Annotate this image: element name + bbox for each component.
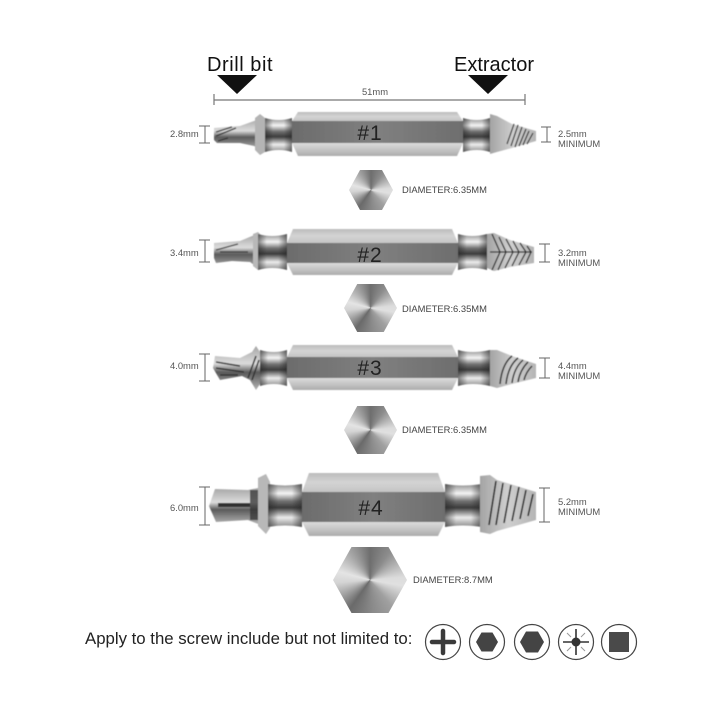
size labels: bit #4: 6.0mm [170, 502, 199, 513]
size labels: bit #2: 3.2mm [558, 247, 587, 258]
dimension: overall length 51mm: 51mm [362, 86, 388, 97]
diameter label #3: DIAMETER:6.35MM [402, 424, 487, 435]
hex cross-section #2 [344, 284, 397, 332]
size labels: bit #1: MINIMUM [558, 138, 600, 149]
hex cross-section #3 [344, 406, 397, 454]
bit #3 [213, 345, 536, 390]
hex cross-section #4 [333, 547, 407, 613]
hex cross-section #1 [349, 170, 393, 210]
size labels: bit #1 [170, 126, 600, 149]
icon: phillips screw [426, 624, 460, 660]
bit #2: #2 [357, 244, 383, 267]
size labels: bit #2 [170, 240, 600, 268]
diameter label #1: DIAMETER:6.35MM [402, 184, 487, 195]
diameter label #4: DIAMETER:8.7MM [413, 574, 493, 585]
caption: screw types: Apply to the screw include but not limited to: [85, 629, 412, 648]
arrow: extractor marker [468, 75, 508, 94]
bit #1: #1 [357, 122, 383, 145]
size labels: bit #3: 4.0mm [170, 360, 199, 371]
size labels: bit #4: 5.2mm [558, 496, 587, 507]
label: Extractor: Extractor [454, 54, 534, 76]
size labels: bit #1: 2.8mm [170, 128, 199, 139]
icon: small hex screw [470, 624, 504, 660]
bit #4: #4 [358, 497, 384, 520]
size labels: bit #4: MINIMUM [558, 506, 600, 517]
size labels: bit #3: 4.4mm [558, 360, 587, 371]
size labels: bit #2: MINIMUM [558, 257, 600, 268]
size labels: bit #1: 2.5mm [558, 128, 587, 139]
bit #3: #3 [357, 357, 383, 380]
size labels: bit #3: MINIMUM [558, 370, 600, 381]
size labels: bit #2: 3.4mm [170, 247, 199, 258]
bit #4 [209, 473, 536, 536]
icon: square screw [602, 624, 636, 660]
diameter label #2: DIAMETER:6.35MM [402, 303, 487, 314]
bit #1 [214, 112, 536, 156]
arrow: drill bit marker [217, 75, 257, 94]
label: Drill bit: Drill bit [207, 54, 273, 76]
size labels: bit #4 [170, 487, 600, 525]
icon: large hex screw [514, 624, 550, 660]
bit #2 [214, 229, 534, 275]
dimension: overall length 51mm [214, 86, 525, 105]
icon: torx screw [558, 624, 594, 660]
size labels: bit #3 [170, 354, 600, 381]
